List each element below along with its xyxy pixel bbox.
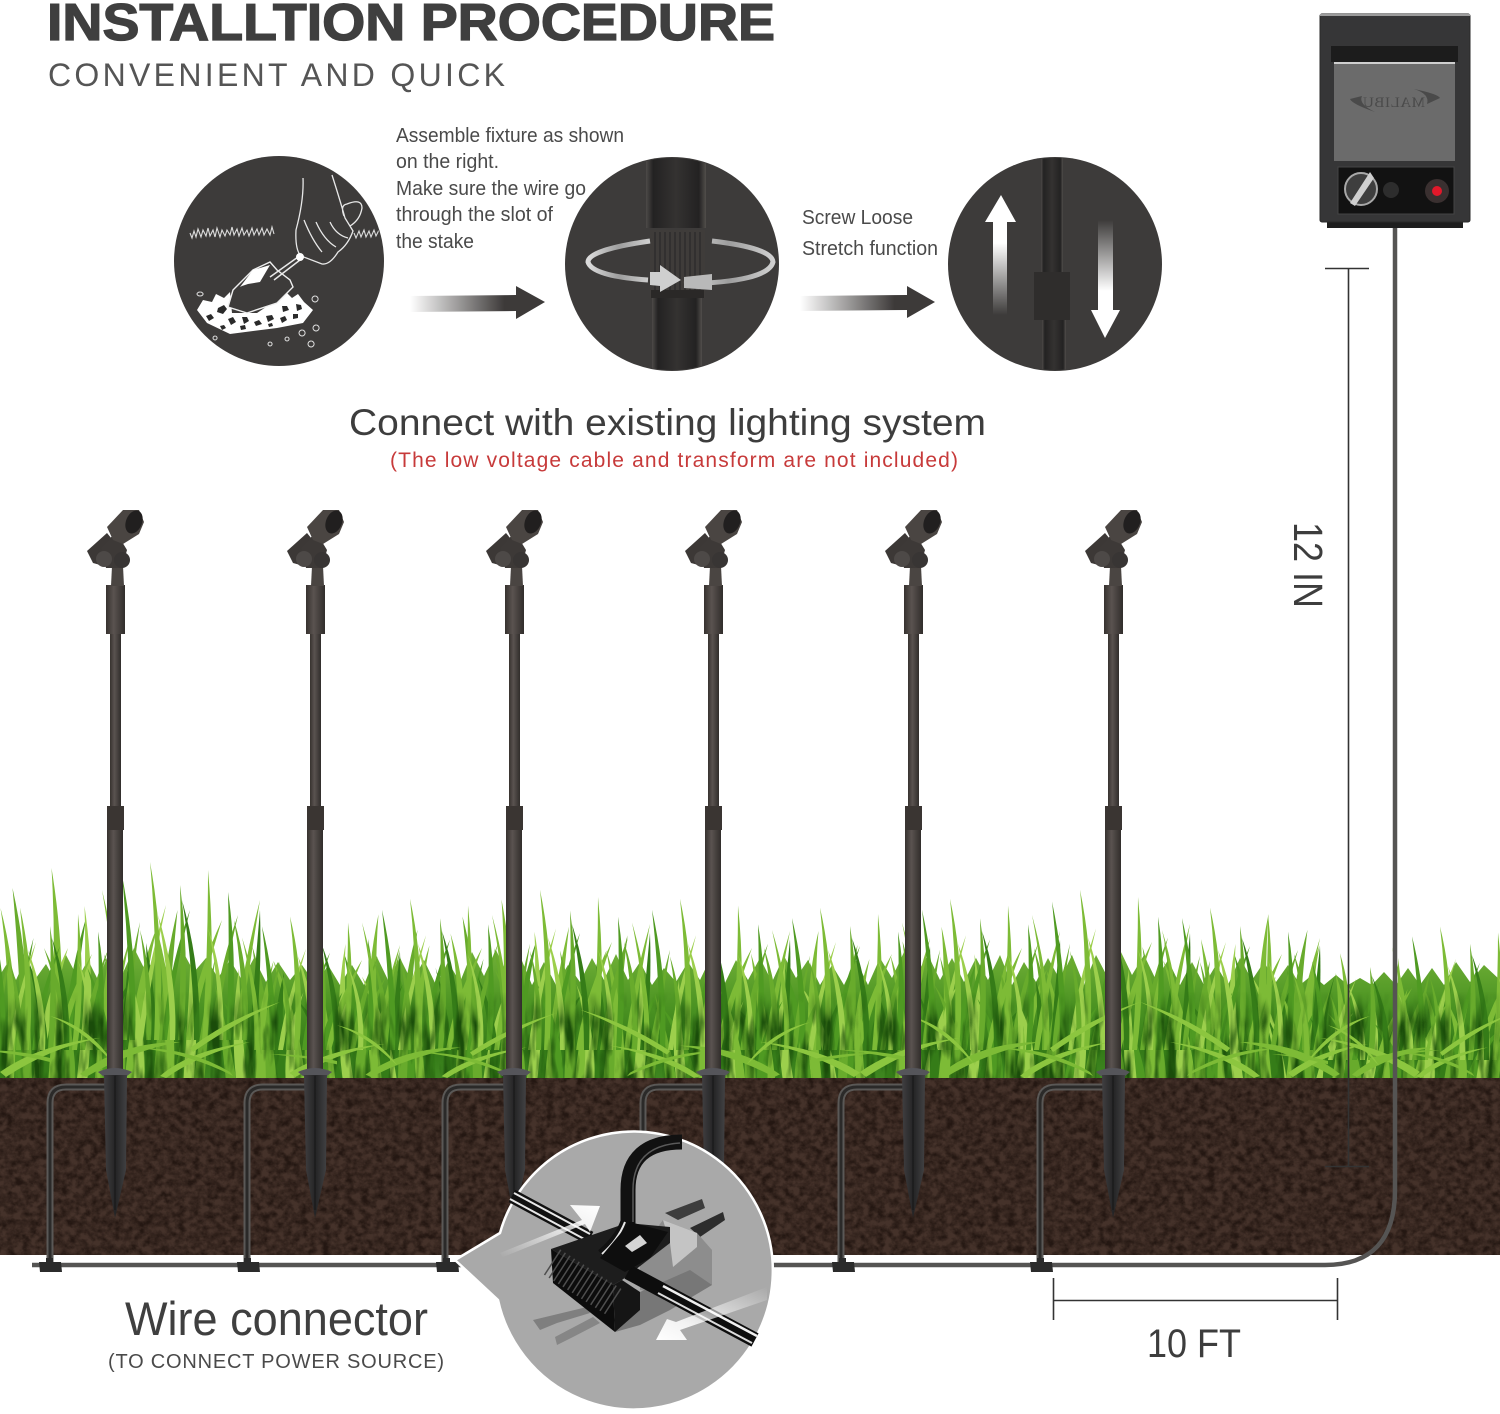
- brand: [1350, 89, 1440, 112]
- upper cable: [603, 1142, 682, 1256]
- cover: [1334, 63, 1455, 161]
- callout: connector detail: [455, 1132, 773, 1410]
- collar: [650, 230, 705, 298]
- wire connector subheading: (TO CONNECT POWER SOURCE): [108, 1351, 444, 1373]
- light fixture 2: [287, 508, 346, 1218]
- tabs: [665, 1199, 705, 1220]
- light fixture 3: [486, 508, 545, 1218]
- label 12 in: 12 IN: [1285, 522, 1331, 608]
- icon: hand: [296, 175, 362, 264]
- arrow lower: [656, 1287, 767, 1340]
- bubble: [455, 1132, 773, 1410]
- instructions text: assemble: the stake: [396, 231, 474, 253]
- panel: twist collar step: [565, 155, 779, 374]
- icon: trowel: [228, 262, 293, 313]
- button red: [1425, 179, 1449, 203]
- soil: [0, 1078, 1500, 1255]
- instructions text: screw loose: Screw Loose: [802, 207, 913, 229]
- instructions text: assemble: on the right.: [396, 151, 499, 173]
- transformer body: [1320, 14, 1470, 222]
- cables: [50, 1087, 1103, 1262]
- pole: [1041, 155, 1063, 275]
- connector black body: [551, 1223, 670, 1285]
- wire connector cables: [50, 1087, 1103, 1262]
- wire clips: [39, 1258, 1053, 1272]
- icon: soil speckle: [206, 304, 302, 330]
- panel: stretch step: [948, 155, 1162, 375]
- instructions text: screw loose: [802, 207, 938, 260]
- label 10 ft: 10 FT: [1147, 1322, 1241, 1366]
- light fixture 5: [885, 508, 944, 1218]
- wire connector heading: Wire connector: [125, 1292, 428, 1345]
- light fixture 6: [1085, 508, 1144, 1218]
- tube upper: [646, 155, 706, 228]
- instructions text: assemble: Assemble fixture as shown: [396, 125, 624, 147]
- dial: [1345, 172, 1377, 206]
- button grey: [1383, 182, 1399, 198]
- arrow: step 2 to 3: [800, 286, 935, 318]
- note: not included: (The low voltage cable and transform are not included): [390, 449, 958, 472]
- heading: connect: Connect with existing lighting system: [349, 402, 986, 443]
- light fixture 1: [87, 508, 146, 1218]
- light fixture 4: [685, 508, 744, 1218]
- icon: up arrow: [985, 195, 1016, 315]
- grass: [0, 862, 1500, 1078]
- dimension: 12 in: [1285, 268, 1369, 1167]
- icon: grass line: [190, 227, 381, 238]
- dimension: 10 ft: [1053, 1278, 1338, 1366]
- panel: dig hole step: [174, 156, 384, 366]
- control panel: [1338, 167, 1454, 214]
- instructions text: assemble: [396, 125, 624, 253]
- wire front: [628, 1272, 757, 1343]
- transformer: [1320, 14, 1470, 228]
- icon: rotation arrow: [588, 241, 773, 292]
- icon: pebbles: [197, 292, 319, 347]
- icon: soil: [197, 292, 313, 334]
- instructions text: assemble: through the slot of: [396, 204, 553, 226]
- subtitle: CONVENIENT AND QUICK: [48, 57, 505, 93]
- tube lower: [652, 298, 702, 374]
- arrow upper: [500, 1205, 600, 1257]
- arrow: step 1 to 2: [410, 286, 545, 319]
- wire back: [510, 1193, 590, 1240]
- collar: [1034, 272, 1070, 320]
- instructions text: assemble: Make sure the wire go: [396, 178, 586, 200]
- trowel shine: [240, 265, 270, 287]
- cable core lines: [50, 1087, 1103, 1262]
- main wire: [32, 226, 1395, 1265]
- icon: down arrow: [1091, 220, 1120, 338]
- trowel handle: [270, 257, 300, 280]
- instructions text: screw loose: Stretch function: [802, 238, 938, 260]
- cover slot: [1331, 46, 1458, 62]
- brand: MALIBU: [1363, 95, 1425, 111]
- connector grey body: [640, 1220, 712, 1295]
- clamp: [600, 1222, 668, 1272]
